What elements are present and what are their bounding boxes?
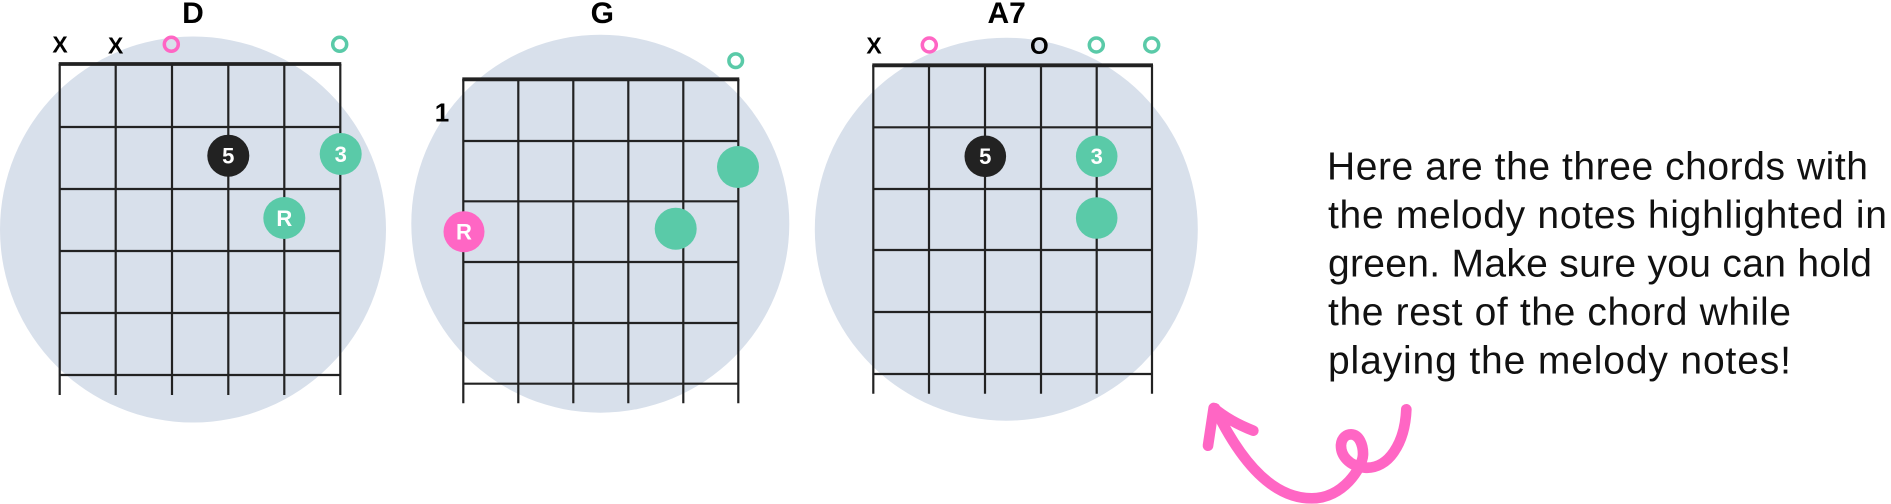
finger dot: third [320, 133, 362, 175]
background circle: A7 [815, 38, 1198, 421]
finger dot: third [1076, 136, 1117, 177]
finger dot: root [263, 197, 305, 239]
text block: explanation: the rest of the chord while [1328, 291, 1791, 334]
arrow: curly pink arrow pointing to the chords [1208, 408, 1406, 498]
string markers: A7: X [866, 32, 882, 58]
string markers: D: X [108, 32, 124, 58]
finger dot: fifth [964, 136, 1006, 177]
fretboard grid: A7 [872, 65, 1153, 394]
finger dot: fifth [207, 135, 249, 177]
finger dot: third: 3 [1091, 144, 1103, 169]
text block: explanation [1327, 145, 1887, 382]
finger dot: melody note [1076, 197, 1117, 239]
finger dot: fifth: 5 [222, 144, 234, 168]
finger dot: melody note, string five [717, 146, 759, 188]
finger dot: fifth: 5 [979, 144, 991, 169]
finger dot: root: R [276, 206, 292, 231]
fretboard grid: D [59, 64, 341, 395]
finger dot: root [444, 211, 484, 252]
panel: G chord [411, 0, 789, 413]
panel: A7 chord [815, 0, 1198, 421]
string marker: G [729, 54, 742, 68]
string markers: D: X [52, 32, 68, 58]
fretboard grid: G [462, 79, 739, 403]
fret number: 1 [435, 98, 449, 128]
background circle: D [0, 36, 386, 422]
text block: explanation: Here are the three chords with [1327, 145, 1868, 188]
text block: explanation: green. Make sure you can hold [1328, 242, 1872, 285]
string markers: A7: O [1030, 33, 1049, 60]
background circle: G [411, 35, 789, 413]
finger dot: melody note, string four [655, 208, 697, 250]
panel: D chord [0, 0, 386, 422]
finger dot: third: 3 [335, 142, 347, 167]
text block: explanation: the melody notes highlighted in [1328, 194, 1887, 237]
text block: explanation: playing the melody notes! [1328, 339, 1791, 382]
finger dot: root: R [456, 220, 472, 244]
string markers: A7 [866, 32, 1159, 60]
string markers: D [52, 32, 347, 58]
